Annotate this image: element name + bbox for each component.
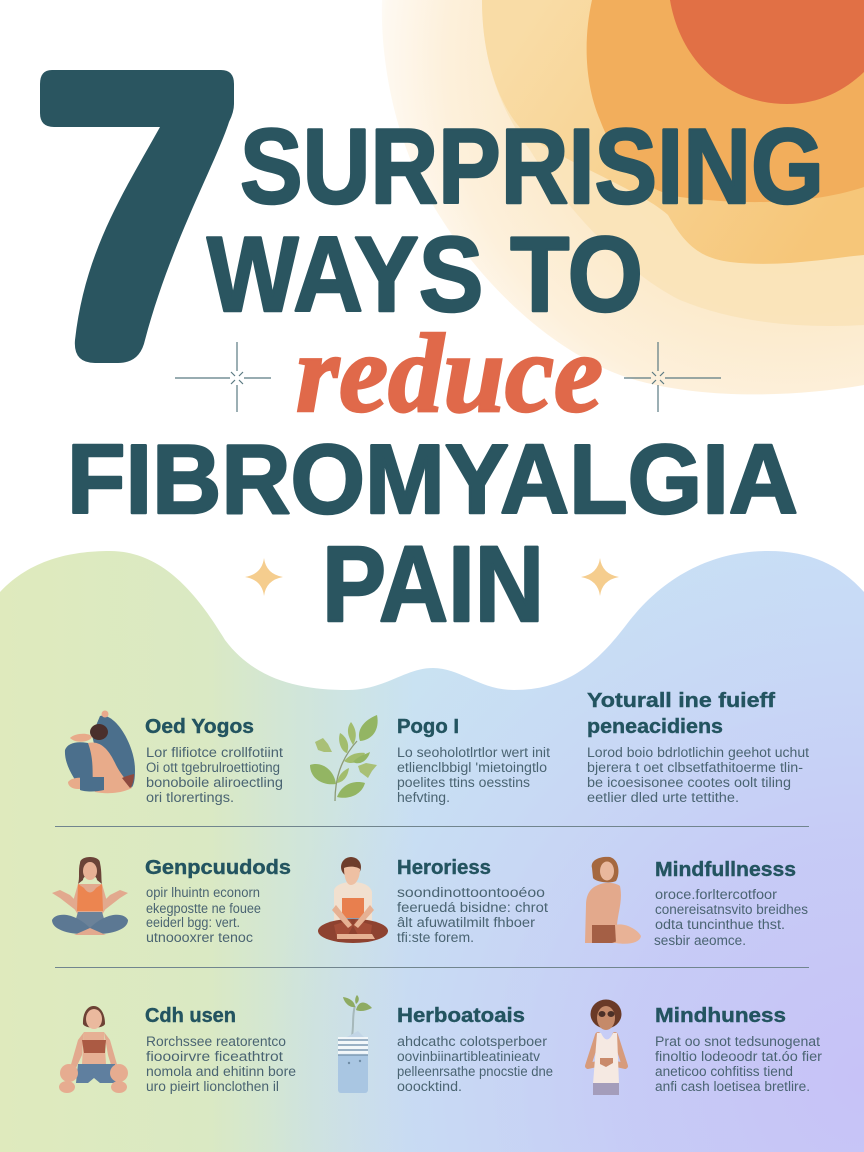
title line: pain: PAIN [322,523,544,644]
body text [655,1034,823,1094]
gold star right [581,558,619,596]
body text: aneticoo cohfitiss tiend [655,1064,793,1079]
body text: finoltio lodeoodr tat.óo fier [655,1049,823,1064]
body text: opir lhuintn econorn [146,885,260,900]
title line: fibromyalgia: FIBROMYALGIA [67,424,798,534]
heading: Mindfullnesss [655,859,796,881]
title line: reduce: reduce [296,312,603,436]
icon: seated woman [585,857,641,944]
item 4: seated pose [52,857,291,945]
icon: standing woman [588,1000,625,1095]
sparkle right [624,342,721,412]
body text [587,745,809,805]
body text: conereisatnsvito breidhes [655,902,808,917]
heading: Cdh usen [145,1005,236,1027]
body text [397,1034,553,1094]
body text: hefvting. [397,790,450,805]
body text [397,885,548,945]
heading: Yoturall ine fuieff [587,690,775,712]
body text: Lorod boio bdrlotlichin geehot uchut [587,745,809,760]
body text: be icoesisonee cootes oolt tiling [587,775,791,790]
body text: ooocktind. [397,1079,462,1094]
body text: tfi:ste forem. [397,930,474,945]
heading: Oed Yogos [145,716,254,738]
body text: nomola and ehitinn bore [146,1064,296,1079]
body text: Lor flifiotce crollfotiint [146,745,283,760]
body text [146,885,261,945]
body text [397,745,550,805]
item 5: seated man [318,857,548,945]
body text: Oi ott tgebrulroettioting [146,760,280,775]
body text: soondinottoontooéoo [397,885,545,900]
item 6: mindfulness [585,857,808,948]
numeral 7 [40,70,234,363]
body text [146,745,283,805]
title [40,70,824,644]
heading: Herboatoais [397,1005,525,1027]
heading: Heroriess [397,857,491,879]
sun: concentric glow top right [382,0,864,394]
heading: Mindhuness [655,1005,786,1027]
item 3: natural remedies [587,690,809,805]
body text: oovinbiinartibleatinieatv [397,1049,540,1064]
body text: pelleenrsathe pnocstie dne [397,1064,553,1079]
icon: meditating woman [52,857,128,935]
body text: bonoboile aliroectling [146,775,283,790]
body text: utnoooxrer tenoc [146,930,253,945]
body text: sesbir aeomce. [654,933,746,948]
title line: ways to: WAYS TO [207,214,643,334]
item 9: mindfulness [588,1000,823,1095]
item 3: natural remedies: peneacidiens [587,716,723,738]
bottom gradient panel with wavy top [0,551,864,1152]
body text: ahdcathc colotsperboer [397,1034,548,1049]
body text: eeiderl bgg: vert. [146,915,240,930]
heading: Pogo I [397,716,459,738]
icon: curled figure [65,710,135,793]
body text: Rorchssee reatorentco [146,1034,286,1049]
body text: eetlier dled urte tettithe. [587,790,739,805]
icon: water bottle with sprout [338,995,372,1093]
body text: âlt afuwatilmilt fhboer [397,915,536,930]
item 1: curled figure [65,710,283,805]
icon: seated woman hands on knees [59,1006,128,1093]
body text: oroce.forltercotfoor [655,887,778,902]
body text: poelites ttins oesstins [397,775,530,790]
body text: anfi cash loetisea bretlire. [655,1079,810,1094]
body text: Lo seoholotlrtlor wert init [397,745,550,760]
gold star left [245,558,283,596]
icon: seated person [318,857,388,943]
body text: fioooirvre ficeathtrot [146,1049,283,1064]
item 8: bottle [338,995,553,1094]
item 2: herb [310,715,550,805]
body text [146,1034,296,1094]
sparkle left [175,342,271,412]
heading: Genpcuudods [145,857,291,879]
body text: odta tuncinthue thst. [655,917,785,932]
item 7: yoga [59,1005,296,1094]
icon: herb sprig [310,715,378,801]
body text: feeruedá bisidne: chrot [397,900,548,915]
body text [654,887,808,948]
body text: ekegpostte ne fouee [146,901,261,916]
body text: Prat oo snot tedsunogenat [655,1034,820,1049]
body text: etlienclbbigl 'mietoingtlo [397,760,547,775]
body text: bjerera t oet clbsetfathitoerme tlin- [587,760,803,775]
body text: uro pieirt lionclothen il [146,1079,279,1094]
body text: ori tlorertings. [146,790,234,805]
